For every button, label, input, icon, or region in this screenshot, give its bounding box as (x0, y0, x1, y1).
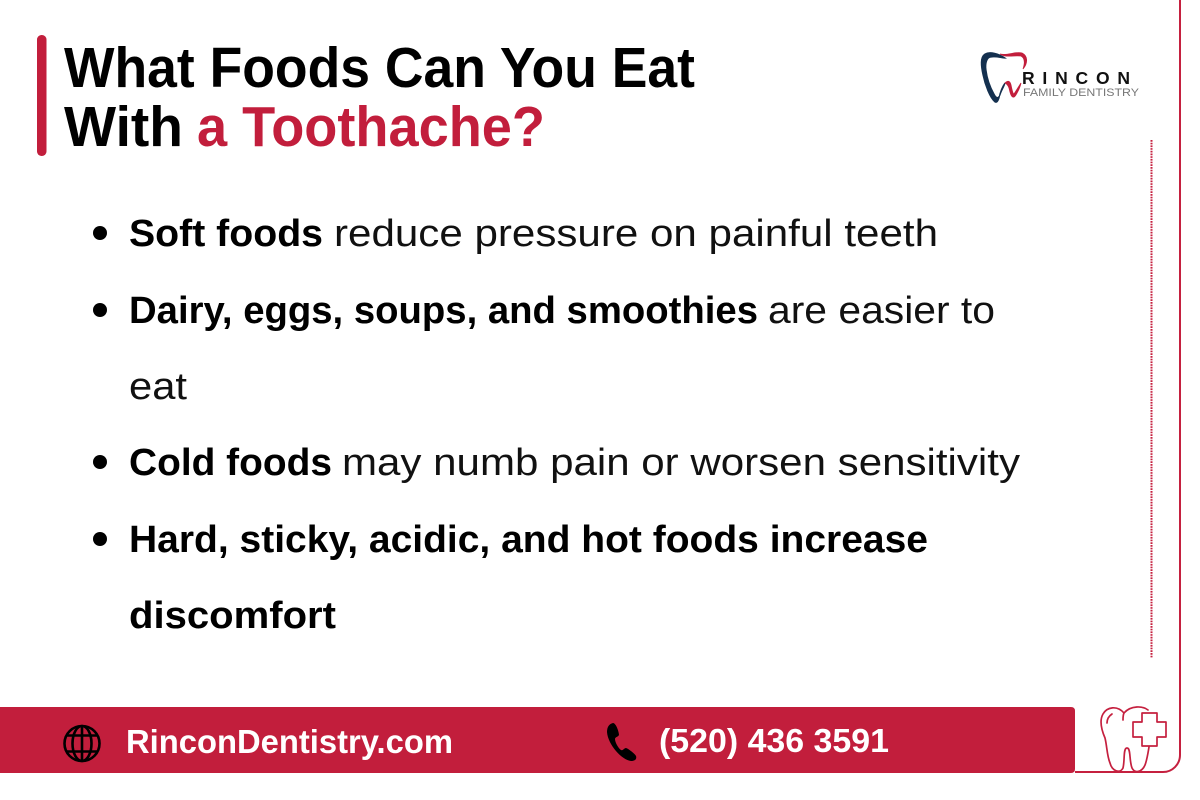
bullet: dairy, eggs, soups, and smoothies: eat (129, 366, 187, 408)
bullet: soft foods (93, 213, 938, 255)
bullet: hard, sticky, acidic, hot foods: discomfort (129, 595, 336, 637)
logo wordmark: RINCON (1022, 68, 1130, 88)
bullet: soft foods: reduce pressure on painful teeth (334, 213, 938, 255)
bullet: dairy, eggs, soups, and smoothies (93, 290, 995, 408)
bullet: hard, sticky, acidic, hot foods: Hard, sticky, acidic, and hot foods increase (129, 519, 928, 561)
title: With (64, 95, 183, 159)
icon: tooth with medical cross (1101, 707, 1166, 772)
bullet: cold foods: may numb pain or worsen sensitivity (342, 442, 1020, 484)
bullet: cold foods: Cold foods (129, 442, 332, 484)
logo tagline: FAMILY DENTISTRY (1023, 87, 1140, 99)
bullet: soft foods: Soft foods (129, 213, 323, 255)
bullet: dairy, eggs, soups, and smoothies: are easier to (768, 290, 995, 332)
title accent bar (37, 35, 46, 156)
bullet: cold foods (93, 442, 1020, 484)
title: a Toothache? (197, 95, 545, 159)
bullet list (93, 213, 1020, 637)
icon: logo tooth (981, 53, 1027, 102)
dotted vertical divider (1150, 140, 1152, 658)
title: What Foods Can You Eat (64, 36, 695, 100)
title (64, 36, 695, 159)
icon: phone (607, 723, 636, 761)
page frame line (1075, 0, 1180, 772)
logo: Rincon Family Dentistry (981, 53, 1140, 102)
bullet: dairy, eggs, soups, and smoothies: Dairy, eggs, soups, and smoothies (129, 290, 758, 332)
icon: globe (64, 726, 100, 761)
phone number: (520) 436 3591 (659, 722, 889, 759)
website: RinconDentistry.com (126, 723, 453, 760)
footer contact bar (0, 707, 1075, 773)
bullet: hard, sticky, acidic, hot foods (93, 519, 928, 637)
